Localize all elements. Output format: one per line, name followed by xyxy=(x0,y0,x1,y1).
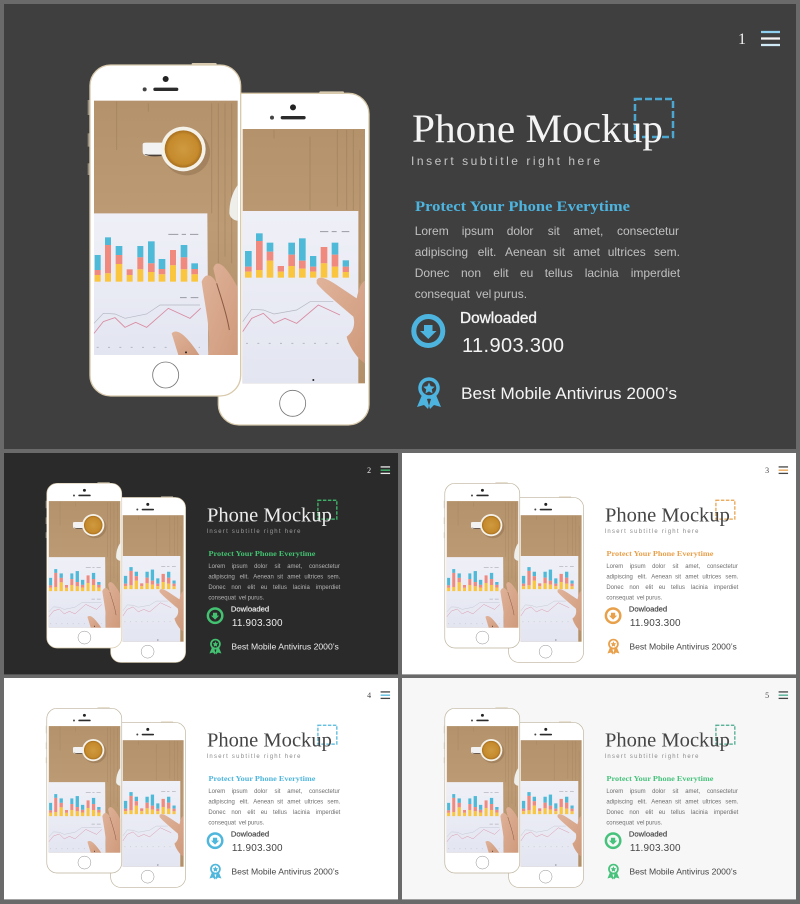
slide 3 body text: adipiscing xyxy=(606,574,633,580)
slide 3 title: Phone Mockup xyxy=(605,505,730,527)
slide 1 download icon xyxy=(414,316,443,346)
slide 2 body text: adipiscing xyxy=(208,574,235,580)
slide 5 title: Phone Mockup xyxy=(605,730,730,752)
panel: slide 3 light orange xyxy=(402,453,796,674)
slide 1 body text: sit xyxy=(553,245,566,259)
slide 5 award text: Best Mobile Antivirus 2000’s xyxy=(629,867,737,877)
slide 1 heading: Protect Your Phone Everytime xyxy=(415,199,630,215)
slide 4 body text: consequat xyxy=(208,820,236,826)
slide 4 body text: elit. xyxy=(240,799,249,805)
slide 1 body text: lacinia xyxy=(585,266,619,280)
slide 1 body text: consectetur xyxy=(617,224,679,238)
slide 3 award icon xyxy=(607,640,619,654)
slide 4 body text: sem. xyxy=(327,799,341,805)
slide 1 download count: 11.903.300 xyxy=(462,335,564,357)
slide 4 body text: consectetur xyxy=(309,789,340,795)
slide 2 body text: imperdiet xyxy=(316,585,341,591)
slide 5 body text: dolor xyxy=(652,789,665,795)
slide 5 page number: 5 xyxy=(765,691,769,700)
slide 4 body text: amet xyxy=(287,799,301,805)
slide 3 body text: ipsum xyxy=(630,564,646,570)
slide 5 body text: eu xyxy=(659,810,665,816)
slide 3 body text: lacinia xyxy=(691,585,708,591)
slide 3 dashed square xyxy=(716,500,735,519)
slide 1 title: Phone Mockup xyxy=(412,106,663,151)
slide 5 body text: consectetur xyxy=(707,789,738,795)
slide 5 body text: Aenean xyxy=(651,799,672,805)
slide 1 downloaded label: Dowloaded xyxy=(460,310,537,327)
slide 5 body text: elit xyxy=(645,810,653,816)
slide 5 body text: tellus xyxy=(671,810,685,816)
slide 3 body text: sem. xyxy=(725,574,739,580)
slide 4 body text: eu xyxy=(261,810,267,816)
slide 4 title: Phone Mockup xyxy=(207,730,332,752)
slide 3 body text: consectetur xyxy=(707,564,738,570)
slide 4 body text: Aenean xyxy=(253,799,274,805)
slide 1 body text: ipsum xyxy=(462,224,494,238)
slide 3 body text: amet, xyxy=(685,564,700,570)
slide 5 body text: sit xyxy=(672,789,679,795)
slide 1 page number: 1 xyxy=(738,31,746,48)
slide 3 body text: ultrices xyxy=(702,574,721,580)
slide 4 body text: Lorem xyxy=(208,789,225,795)
slide 4 body text: Donec xyxy=(208,810,226,816)
slide 5 dashed square xyxy=(716,725,735,744)
slide 3 body text: Donec xyxy=(606,585,624,591)
slide 3 body text: non xyxy=(629,585,639,591)
slide 2 heading: Protect Your Phone Everytime xyxy=(208,549,316,558)
slide 4 body text: amet, xyxy=(287,789,302,795)
slide 2 body text: tellus xyxy=(273,585,287,591)
slide 5 body text: ultrices xyxy=(702,799,721,805)
slide 3 page number: 3 xyxy=(765,466,769,475)
slide 3 body text: elit xyxy=(645,585,653,591)
slide 1 body text: elit. xyxy=(478,245,496,259)
slide 4 body text: vel xyxy=(239,820,246,826)
slide 3 downloaded label: Dowloaded xyxy=(629,605,667,614)
slide 2 phone mockups xyxy=(46,482,186,662)
slide 4 body text: sit xyxy=(274,789,281,795)
slide 1 dashed square xyxy=(635,99,673,137)
slide 2 award text: Best Mobile Antivirus 2000’s xyxy=(231,642,339,652)
slide 2 body text: consequat xyxy=(208,595,236,601)
slide 5 body text: vel xyxy=(637,820,644,826)
slide 3 body text: purus. xyxy=(646,595,663,601)
slide 4 award text: Best Mobile Antivirus 2000’s xyxy=(231,867,339,877)
slide 2 body text: sit xyxy=(277,574,283,580)
slide 2 body text: lacinia xyxy=(293,585,310,591)
slide 3 body text: elit. xyxy=(638,574,647,580)
slide 1 body text: purus. xyxy=(494,287,527,301)
slide 5 subtitle: Insert subtitle right here xyxy=(604,754,699,760)
slide 1 body text: sit xyxy=(548,224,560,238)
slide 4 heading: Protect Your Phone Everytime xyxy=(208,774,316,783)
slide 5 body text: ipsum xyxy=(630,789,646,795)
slide 4 award icon xyxy=(209,865,221,879)
slide 2 body text: dolor xyxy=(254,564,267,570)
slide 4 body text: non xyxy=(231,810,241,816)
slide 2 body text: vel xyxy=(239,595,246,601)
slide 5 body text: non xyxy=(629,810,639,816)
slide 3 download icon xyxy=(606,608,620,623)
slide 2 body text: elit. xyxy=(240,574,249,580)
slide 2 page number: 2 xyxy=(367,466,371,475)
slide 4 body text: ultrices xyxy=(304,799,323,805)
slide 3 body text: tellus xyxy=(671,585,685,591)
slide 2 body text: eu xyxy=(261,585,267,591)
slide 1 body text: consequat xyxy=(415,287,471,301)
slide 2 body text: ipsum xyxy=(232,564,248,570)
slide 3 subtitle: Insert subtitle right here xyxy=(604,529,699,535)
slide 2 body text: Donec xyxy=(208,585,226,591)
slide 1 body text: amet, xyxy=(573,224,603,238)
slide 5 phone mockups xyxy=(444,707,584,887)
slide 4 body text: adipiscing xyxy=(208,799,235,805)
slide 3 body text: Aenean xyxy=(651,574,672,580)
slide 5 body text: sit xyxy=(675,799,681,805)
slide 1 phone mockups xyxy=(88,63,369,425)
slide 5 body text: purus. xyxy=(646,820,663,826)
slide 3 body text: eu xyxy=(659,585,665,591)
slide 1 subtitle: Insert subtitle right here xyxy=(411,154,600,168)
slide 2 body text: elit xyxy=(247,585,255,591)
slide 2 subtitle: Insert subtitle right here xyxy=(206,529,301,535)
slide 4 body text: sit xyxy=(277,799,283,805)
slide 2 body text: amet, xyxy=(287,564,302,570)
slide 1 body text: vel xyxy=(476,287,491,301)
panel: slide 5 light green xyxy=(402,678,796,899)
slide 5 body text: amet, xyxy=(685,789,700,795)
slide 5 body text: lacinia xyxy=(691,810,708,816)
slide 2 body text: Lorem xyxy=(208,564,225,570)
slide 2 menu icon xyxy=(381,467,390,473)
slide 4 body text: elit xyxy=(247,810,255,816)
slide 5 body text: adipiscing xyxy=(606,799,633,805)
slide 1 body text: adipiscing xyxy=(415,245,468,259)
slide 1 body text: eu xyxy=(520,266,533,280)
slide 2 download count: 11.903.300 xyxy=(232,618,283,629)
slide 5 body text: Lorem xyxy=(606,789,623,795)
slide 5 award icon xyxy=(607,865,619,879)
slide 2 dashed square xyxy=(318,500,337,519)
slide 5 body text: imperdiet xyxy=(714,810,739,816)
slide 5 body text: amet xyxy=(685,799,699,805)
slide 4 download count: 11.903.300 xyxy=(232,843,283,854)
slide 2 body text: amet xyxy=(287,574,301,580)
panel: slide 1 dark blue xyxy=(4,4,796,449)
slide 5 heading: Protect Your Phone Everytime xyxy=(606,774,714,783)
slide 4 subtitle: Insert subtitle right here xyxy=(206,754,301,760)
slide 2 download icon xyxy=(208,608,222,623)
slide 1 menu icon xyxy=(761,32,780,45)
panel: slide 2 dark green xyxy=(4,453,398,674)
slide 3 menu icon xyxy=(779,467,788,473)
slide 1 body text: amet xyxy=(573,245,601,259)
slide 4 body text: dolor xyxy=(254,789,267,795)
slide 2 body text: purus. xyxy=(248,595,265,601)
slide 1 body text: Lorem xyxy=(415,224,449,238)
slide 1 body text: tellus xyxy=(545,266,573,280)
slide 1 body text: Aenean xyxy=(505,245,546,259)
slide 2 body text: consectetur xyxy=(309,564,340,570)
slide 1 award text: Best Mobile Antivirus 2000’s xyxy=(461,384,677,403)
slide 2 body text: Aenean xyxy=(253,574,274,580)
slide 5 background xyxy=(402,678,796,899)
slide 1 body text: sem. xyxy=(654,245,680,259)
slide 4 body text: imperdiet xyxy=(316,810,341,816)
panel: slide 4 light blue xyxy=(4,678,398,899)
slide 4 background xyxy=(4,678,398,899)
slide 4 dashed square xyxy=(318,725,337,744)
slide 1 body text: elit xyxy=(493,266,509,280)
slide 3 body text: sit xyxy=(672,564,679,570)
slide 5 body text: sem. xyxy=(725,799,739,805)
slide 5 body text: Donec xyxy=(606,810,624,816)
slide 2 body text: non xyxy=(231,585,241,591)
slide 3 body text: vel xyxy=(637,595,644,601)
slide 1 background xyxy=(4,4,796,449)
slide 2 title: Phone Mockup xyxy=(207,505,332,527)
slide 1 award icon xyxy=(417,379,441,409)
slide 2 body text: ultrices xyxy=(304,574,323,580)
slide 4 downloaded label: Dowloaded xyxy=(231,830,269,839)
slide 3 heading: Protect Your Phone Everytime xyxy=(606,549,714,558)
slide 5 downloaded label: Dowloaded xyxy=(629,830,667,839)
slide 3 body text: consequat xyxy=(606,595,634,601)
slide 4 download icon xyxy=(208,833,222,848)
slide 4 body text: lacinia xyxy=(293,810,310,816)
slide 5 menu icon xyxy=(779,692,788,698)
slide 3 body text: imperdiet xyxy=(714,585,739,591)
slide 5 body text: elit. xyxy=(638,799,647,805)
slide 4 body text: ipsum xyxy=(232,789,248,795)
slide 5 download icon xyxy=(606,833,620,848)
slide 3 phone mockups xyxy=(444,482,584,662)
slide 3 body text: amet xyxy=(685,574,699,580)
slide 2 award icon xyxy=(209,640,221,654)
slide 3 download count: 11.903.300 xyxy=(630,618,681,629)
slide 1 body text: ultrices xyxy=(608,245,646,259)
slide 5 body text: consequat xyxy=(606,820,634,826)
slide 4 phone mockups xyxy=(46,707,186,887)
slide 3 body text: Lorem xyxy=(606,564,623,570)
slide 1 body text: non xyxy=(461,266,481,280)
slide 1 body text: imperdiet xyxy=(631,266,681,280)
slide 5 download count: 11.903.300 xyxy=(630,843,681,854)
slide 4 body text: purus. xyxy=(248,820,265,826)
slide 3 award text: Best Mobile Antivirus 2000’s xyxy=(629,642,737,652)
slide 4 page number: 4 xyxy=(367,691,371,700)
slide 2 downloaded label: Dowloaded xyxy=(231,605,269,614)
slide 4 menu icon xyxy=(381,692,390,698)
slide 1 body text: Donec xyxy=(415,266,449,280)
slide 4 body text: tellus xyxy=(273,810,287,816)
slide 2 body text: sit xyxy=(274,564,281,570)
slide 3 body text: dolor xyxy=(652,564,665,570)
slide 3 body text: sit xyxy=(675,574,681,580)
slide 1 body text: dolor xyxy=(507,224,533,238)
slide 3 background xyxy=(402,453,796,674)
slide 2 background xyxy=(4,453,398,674)
slide 2 body text: sem. xyxy=(327,574,341,580)
